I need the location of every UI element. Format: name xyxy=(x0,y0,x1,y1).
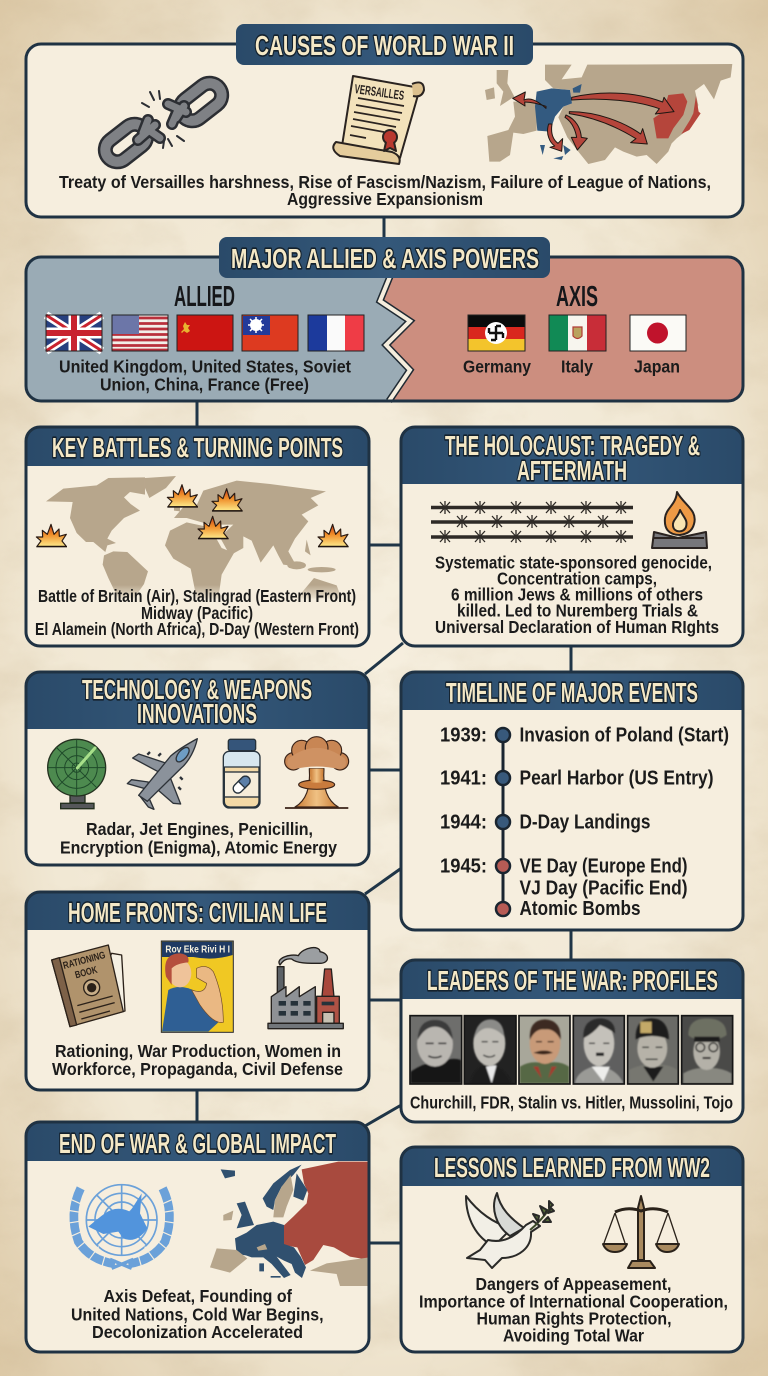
text: end of war xyxy=(71,1286,324,1342)
text: axis countries: Germany xyxy=(463,356,531,376)
heading: key battles: KEY BATTLES & TURNING POINTS xyxy=(52,432,343,463)
icon: radar xyxy=(48,739,106,809)
heading: powers: MAJOR ALLIED & AXIS POWERS xyxy=(231,243,539,274)
flag: UK xyxy=(46,315,102,351)
heading: holocaust xyxy=(445,430,700,486)
icon: propaganda poster xyxy=(161,941,233,1032)
icon: barbed wire xyxy=(431,501,633,543)
world map with battle explosions xyxy=(36,476,349,599)
flag: Italy xyxy=(549,315,606,351)
icon: Versailles scroll xyxy=(333,76,424,164)
side: axis xyxy=(380,257,743,401)
icon: scales of justice xyxy=(603,1196,679,1268)
text: lessons: Avoiding Total War xyxy=(503,1326,644,1346)
text: end of war: Decolonization Accelerated xyxy=(92,1322,303,1342)
timeline events xyxy=(440,724,729,920)
icon: United Nations emblem xyxy=(66,1185,177,1268)
label: Versailles: VERSAILLES xyxy=(354,81,405,103)
timeline events: Invasion of Poland (Start) xyxy=(520,724,729,746)
timeline events: VE Day (Europe End) xyxy=(520,856,688,878)
text: lessons: Human Rights Protection, xyxy=(476,1308,672,1328)
timeline events: Pearl Harbor (US Entry) xyxy=(520,768,714,790)
heading: technology xyxy=(82,674,312,729)
text: allied countries xyxy=(59,356,351,394)
text: holocaust: Concentration camps, xyxy=(497,568,657,588)
timeline events: 1944: xyxy=(440,812,487,834)
flag: France xyxy=(308,315,364,351)
text: lessons: Dangers of Appeasement, xyxy=(476,1274,672,1294)
map: aggressive expansion xyxy=(485,64,732,164)
flag: Japan xyxy=(630,315,686,351)
icon: penicillin bottle xyxy=(223,739,260,808)
panel: key battles xyxy=(26,427,369,646)
heading: powers xyxy=(219,237,550,278)
text: end of war: Axis Defeat, Founding of xyxy=(104,1286,292,1306)
text: causes xyxy=(59,172,711,209)
text: holocaust: Systematic state-sponsored genocide, xyxy=(435,552,712,572)
heading: holocaust: AFTERMATH xyxy=(517,455,627,486)
portrait: Churchill xyxy=(410,1016,462,1084)
text: causes: Aggressive Expansionism xyxy=(287,189,483,209)
text: axis countries: Japan xyxy=(634,356,680,376)
text: battles: Midway (Pacific) xyxy=(141,603,253,623)
icon: ration book: BOOK xyxy=(74,965,99,981)
label: ration book: RATIONING xyxy=(62,950,107,972)
text: technology: Encryption (Enigma), Atomic Energy xyxy=(60,838,337,858)
flag: Germany xyxy=(468,315,525,351)
text: holocaust: killed. Led to Nuremberg Trials & xyxy=(457,600,698,620)
icon: ration book xyxy=(52,945,125,1027)
panel: leaders xyxy=(401,960,743,1122)
panel: holocaust xyxy=(401,427,743,646)
text: lessons: Importance of International Cooperation, xyxy=(419,1292,728,1312)
heading: technology: TECHNOLOGY & WEAPONS xyxy=(82,674,312,705)
text: home fronts: Rationing, War Production, Women in xyxy=(55,1041,341,1061)
heading: end of war: END OF WAR & GLOBAL IMPACT xyxy=(59,1128,336,1159)
text: battles: El Alamein (North Africa), D-Day (Western Front) xyxy=(35,619,359,639)
timeline events: 1941: xyxy=(440,768,487,790)
panel: home fronts xyxy=(26,892,369,1090)
connector lines xyxy=(197,217,571,1243)
text: holocaust: Universal Declaration of Human RIghts xyxy=(435,617,719,637)
heading: causes xyxy=(236,24,533,65)
text: causes: Treaty of Versailles harshness, Rise of Fascism/Nazism, Failure of League of Nations, xyxy=(59,172,711,192)
text: allied countries: United Kingdom, United States, Soviet xyxy=(59,356,351,376)
heading: axis: AXIS xyxy=(556,281,598,313)
portrait: Stalin xyxy=(519,1016,570,1084)
label: poster: Rov Eke Rivi H I xyxy=(165,944,230,955)
text: battles: Battle of Britain (Air), Stalingrad (Eastern Front) xyxy=(38,586,356,606)
text: end of war: United Nations, Cold War Begins, xyxy=(71,1304,324,1324)
timeline events: VJ Day (Pacific End) xyxy=(520,878,688,900)
heading: allied: ALLIED xyxy=(174,281,235,313)
portrait: Mussolini xyxy=(628,1016,678,1084)
panel: lessons xyxy=(401,1147,743,1352)
flag: USSR xyxy=(177,315,233,351)
icon: atomic mushroom cloud xyxy=(285,737,349,808)
text: lessons xyxy=(419,1274,728,1346)
text: allied countries: Union, China, France (Free) xyxy=(100,374,309,394)
text: technology xyxy=(60,819,337,858)
text: axis countries xyxy=(463,356,680,376)
timeline events: D-Day Landings xyxy=(520,812,650,834)
flag: China xyxy=(242,315,298,351)
icon: memorial flame xyxy=(652,492,707,548)
panel: causes xyxy=(26,24,743,217)
heading: technology: INNOVATIONS xyxy=(137,698,257,729)
panel: timeline xyxy=(401,672,743,930)
text: holocaust xyxy=(435,552,719,637)
map: post-war Europe xyxy=(210,1162,370,1286)
text: battles xyxy=(35,586,359,639)
panel: technology xyxy=(26,672,369,865)
icon: factory xyxy=(268,948,343,1029)
timeline events: Atomic Bombs xyxy=(520,898,640,920)
text: axis countries: Italy xyxy=(561,356,593,376)
portrait: Roosevelt xyxy=(464,1016,516,1084)
text: home fronts: Workforce, Propaganda, Civil Defense xyxy=(52,1059,343,1079)
heading: causes: CAUSES OF WORLD WAR II xyxy=(255,30,514,61)
text: home fronts xyxy=(52,1041,343,1079)
zigzag divider xyxy=(380,257,410,401)
portrait: Tojo xyxy=(682,1016,733,1084)
icon: jet xyxy=(127,739,197,809)
panel: end of war xyxy=(26,1122,370,1352)
text: technology: Radar, Jet Engines, Penicillin, xyxy=(86,819,313,839)
timeline events: 1945: xyxy=(440,856,487,878)
icon: dove with olive branch xyxy=(466,1193,554,1268)
panel: powers xyxy=(26,237,743,401)
icon: broken chain xyxy=(100,78,227,167)
flag: USA xyxy=(112,315,168,351)
timeline events: 1939: xyxy=(440,724,487,746)
timeline axis xyxy=(496,728,510,916)
heading: home fronts: HOME FRONTS: CIVILIAN LIFE xyxy=(68,897,327,928)
side: allied xyxy=(26,257,410,401)
portrait: Hitler xyxy=(573,1016,624,1084)
text: holocaust: 6 million Jews & millions of others xyxy=(451,584,703,604)
